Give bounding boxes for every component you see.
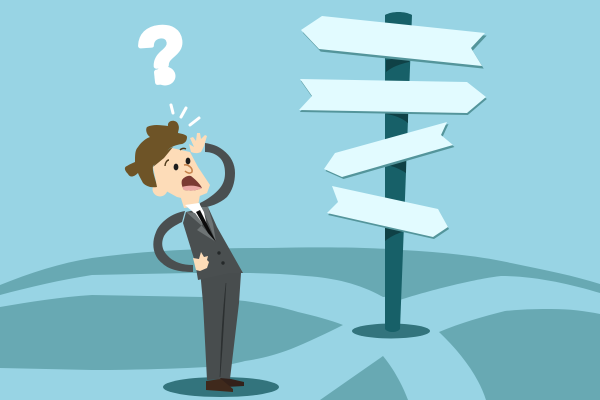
signpost: [299, 12, 487, 332]
shirt collar: [185, 203, 207, 226]
trousers: [200, 268, 241, 380]
hair fringe: [153, 147, 173, 167]
hand-on-hip arm: [153, 211, 193, 272]
ear: [152, 182, 168, 196]
neck: [180, 195, 200, 208]
sign 2: [299, 79, 487, 115]
sign 3: [324, 122, 454, 179]
mouth: [182, 176, 202, 191]
trouser crease: [220, 283, 226, 377]
jacket buttons: [217, 251, 225, 265]
ground: far hill band: [0, 247, 600, 300]
front shoe: [206, 379, 233, 392]
back shoe: [220, 378, 244, 387]
tie: [196, 210, 216, 242]
signpost shadow: [352, 324, 430, 338]
sign 1: [301, 16, 487, 69]
nose: [184, 165, 192, 173]
hip hand: [193, 252, 209, 271]
head: [125, 121, 210, 200]
businessman: [125, 121, 244, 392]
eyebrows: [165, 148, 186, 166]
eyes: [174, 158, 190, 170]
right lapel: [202, 207, 216, 242]
question mark: ?: [134, 9, 190, 101]
sign 4: [327, 186, 449, 239]
raised hand: [189, 133, 207, 153]
hair: [125, 121, 187, 187]
left lapel: [186, 212, 216, 242]
face: [153, 148, 210, 200]
pole: [385, 12, 412, 332]
ground: right field: [439, 309, 600, 400]
surprise marks: [171, 105, 199, 125]
man shadow: [163, 377, 279, 397]
tongue: [182, 186, 202, 191]
ground: bottom wedge: [320, 356, 408, 400]
raised arm: [200, 143, 235, 208]
jacket: [183, 207, 243, 280]
ground: left field: [0, 295, 343, 370]
pole shadows under signs: [386, 56, 410, 72]
